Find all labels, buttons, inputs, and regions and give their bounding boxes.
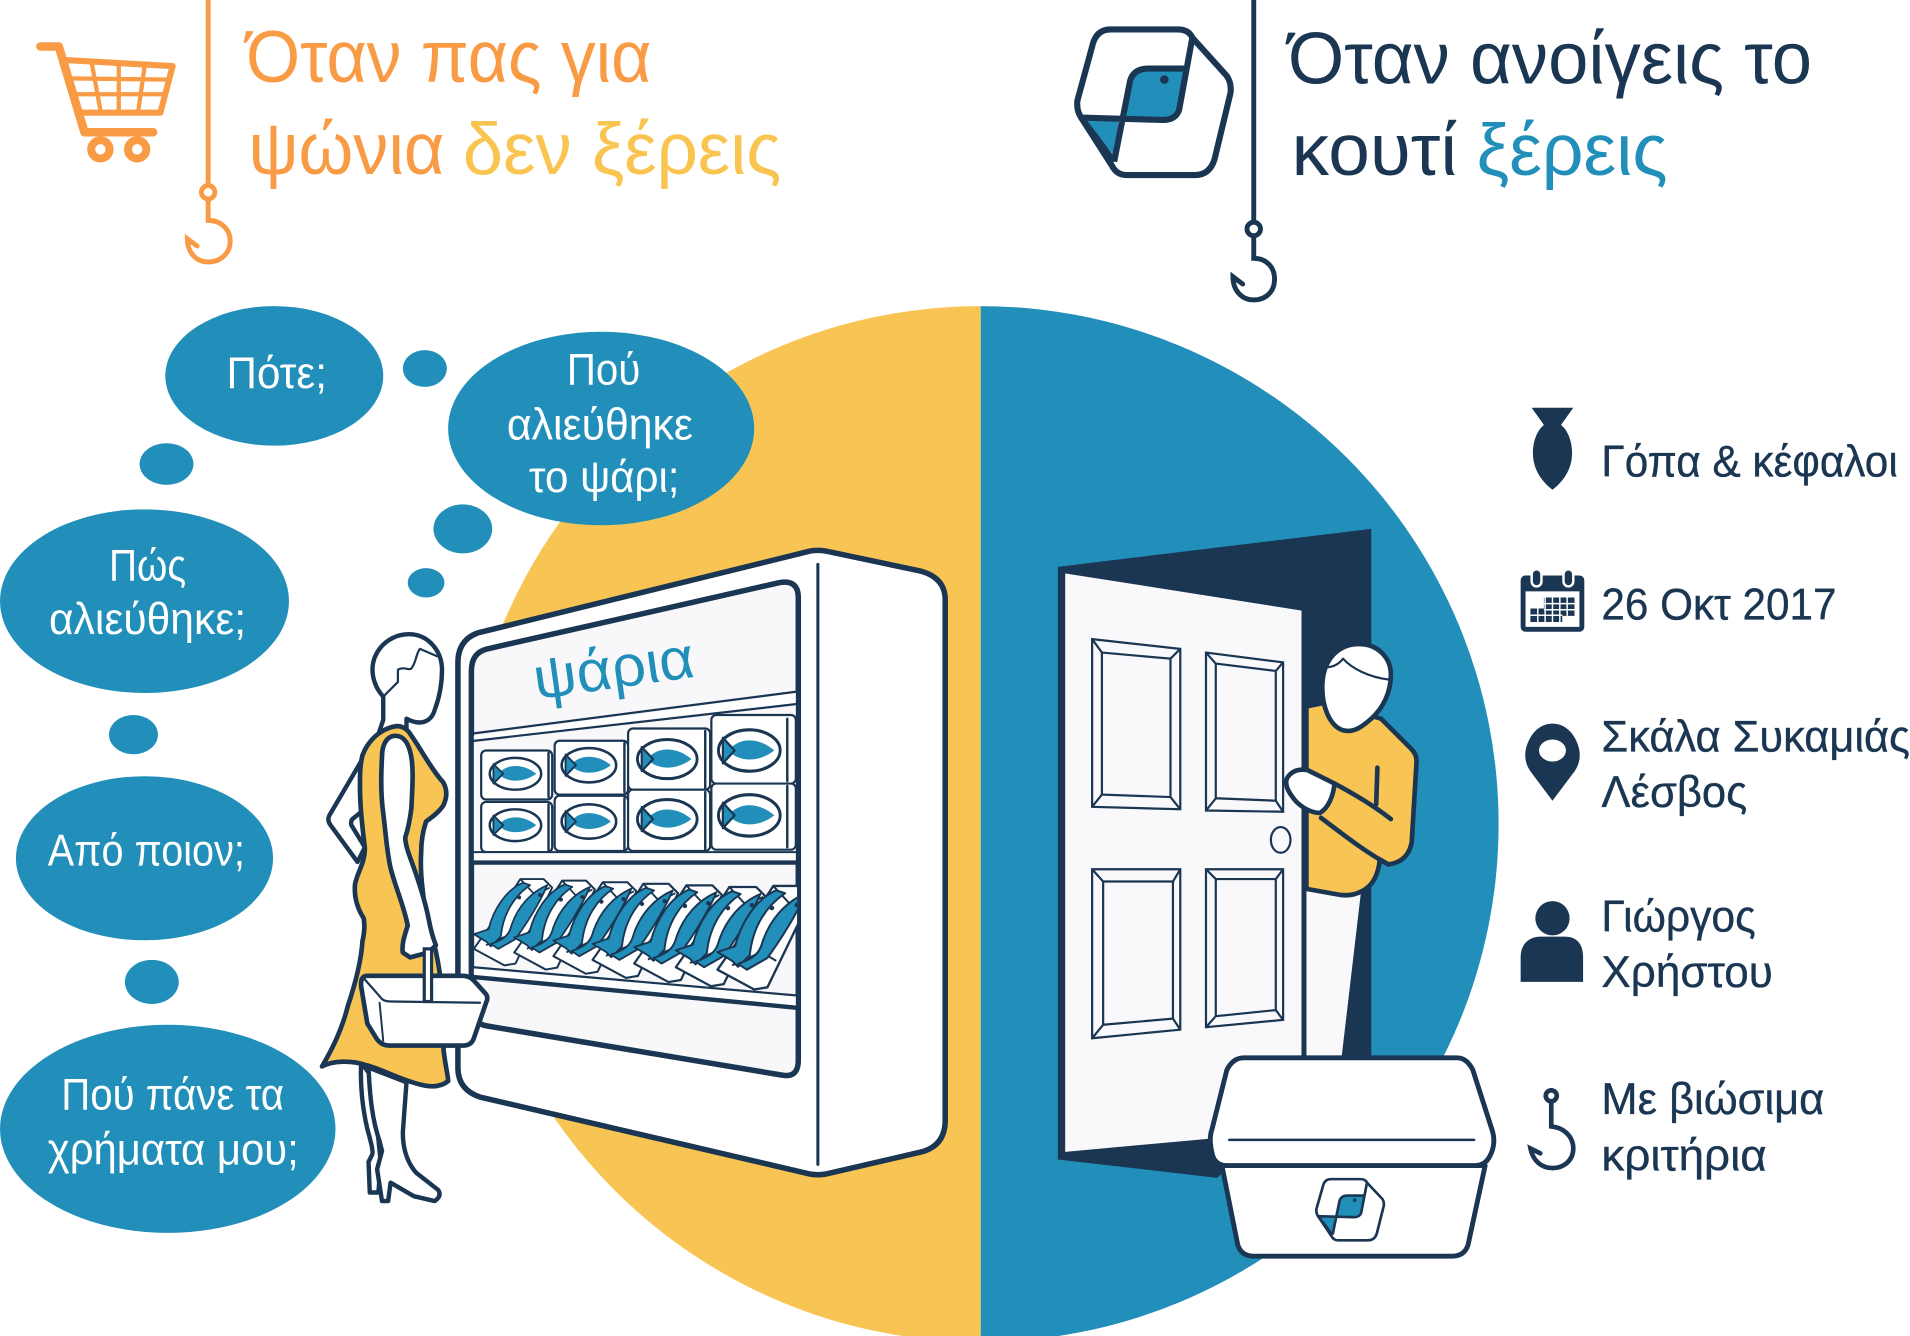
title: left: ψώνια	[249, 107, 444, 190]
title: left: Όταν πας για	[243, 15, 651, 98]
detail: date: 26 Οκτ 2017	[1601, 581, 1837, 630]
title: left	[243, 15, 781, 190]
hook: orange	[187, 0, 230, 262]
bubble: when: Πότε;	[227, 349, 327, 398]
box lid	[1210, 1058, 1494, 1166]
back arm	[328, 759, 366, 862]
title: right	[1285, 16, 1812, 191]
detail: location: Σκάλα Συκαμιάς	[1601, 713, 1910, 762]
woman shopper	[322, 634, 487, 1201]
bubble: where money goes	[0, 1025, 335, 1233]
detail: date	[1521, 569, 1837, 632]
mini logo	[1316, 1179, 1384, 1240]
title: right: Όταν ανοίγεις το	[1285, 16, 1812, 99]
bubble: where caught: Πού	[567, 345, 640, 394]
shopping basket	[361, 949, 487, 1046]
bubble: how caught: Πώς	[109, 541, 186, 590]
detail: sustainable criteria: κριτήρια	[1601, 1131, 1767, 1180]
door	[1063, 571, 1304, 1155]
fridge window	[471, 582, 798, 1076]
yellow sweater	[1306, 703, 1417, 895]
box body	[1222, 1166, 1485, 1256]
detail: person	[1521, 893, 1773, 997]
thought bubbles	[0, 306, 754, 1233]
title: right: κουτί	[1292, 108, 1457, 191]
detail: fish species: Γόπα & κέφαλοι	[1601, 437, 1898, 486]
fish label: ψάρια	[529, 625, 698, 712]
door knob	[1271, 827, 1290, 853]
front leg	[369, 1068, 440, 1201]
detail: person: Χρήστου	[1601, 948, 1773, 997]
upper shelf	[474, 692, 796, 853]
bubble: by whom: Από ποιον;	[48, 827, 245, 876]
bubble: where money goes: χρήματα μου;	[48, 1125, 299, 1174]
detail: sustainable criteria	[1530, 1075, 1824, 1180]
details list	[1521, 408, 1910, 1180]
bubble: when	[165, 306, 383, 446]
arm lines	[1321, 768, 1391, 864]
door panels	[1092, 639, 1283, 1038]
bubble: where caught	[448, 332, 754, 525]
blue half circle	[981, 306, 1499, 1336]
bubble: how caught: αλιεύθηκε;	[49, 595, 246, 644]
bubble: where caught: το ψάρι;	[529, 453, 680, 502]
title: left: δεν ξέρεις	[463, 107, 781, 190]
title: right: ξέρεις	[1477, 108, 1668, 191]
fridge display	[458, 550, 945, 1175]
icon: shopping cart	[40, 47, 173, 159]
small thought dots	[109, 350, 492, 1004]
yellow half circle	[463, 306, 981, 1336]
door frame shadow	[1058, 529, 1371, 1178]
trousers	[1306, 888, 1361, 1065]
fridge body	[458, 550, 945, 1175]
detail: location: Λέσβος	[1601, 768, 1747, 817]
hook: navy	[1233, 0, 1275, 300]
head	[1322, 644, 1391, 731]
back leg	[361, 1063, 381, 1193]
detail: location	[1525, 713, 1910, 817]
lower shelf	[474, 967, 796, 1008]
bubble: by whom	[16, 776, 273, 940]
bubble: how caught	[0, 509, 289, 693]
man behind door	[1306, 644, 1417, 1065]
bubble: where money goes: Πού πάνε τα	[61, 1070, 284, 1119]
sardine packs	[474, 879, 812, 990]
man's hand on door	[1286, 770, 1335, 813]
head	[373, 634, 442, 735]
detail: fish species	[1532, 408, 1898, 490]
icon: box logo	[1077, 29, 1231, 175]
tin packages	[481, 715, 796, 852]
cooler box	[1210, 1058, 1494, 1256]
bubble: where caught: αλιεύθηκε	[507, 401, 693, 450]
detail: person: Γιώργος	[1601, 893, 1756, 942]
detail: sustainable criteria: Με βιώσιμα	[1601, 1075, 1824, 1124]
middle shelf	[474, 852, 796, 863]
yellow dress	[322, 726, 448, 1086]
front arm	[381, 736, 436, 957]
